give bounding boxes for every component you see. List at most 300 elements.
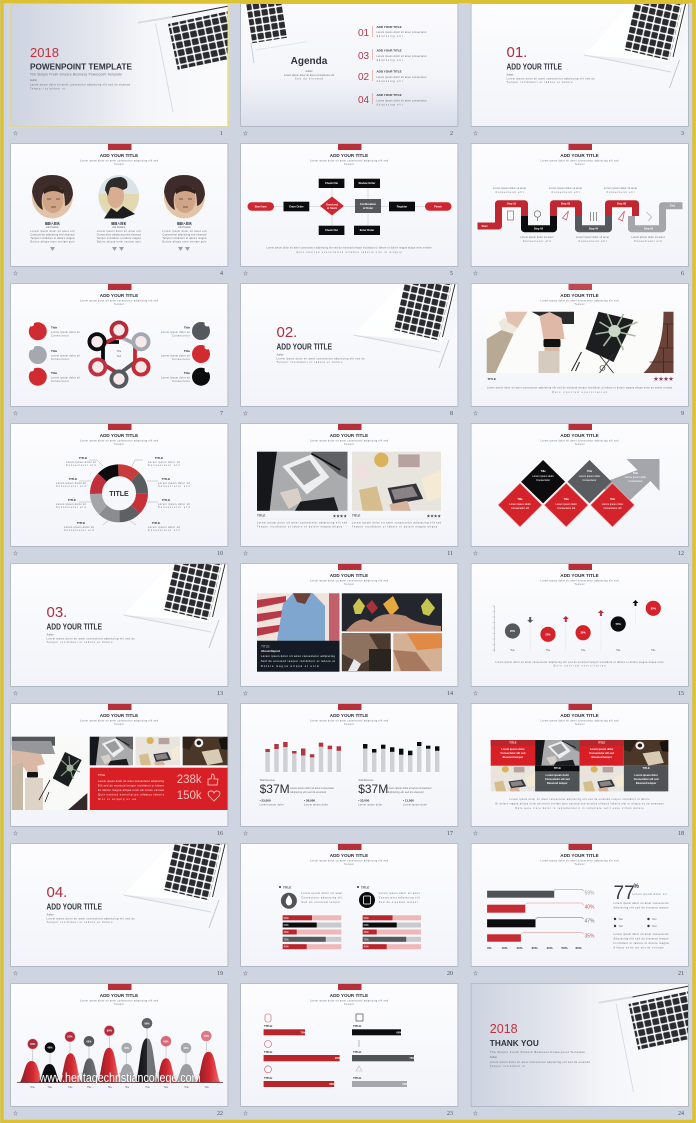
page number 14: ☆ <box>243 690 248 697</box>
legend: Text <box>618 925 623 928</box>
member 1 text: Tempor incididunt ut labore magna <box>30 237 75 240</box>
member 3 text: Dolore aliqua enim veniam quis <box>162 240 207 244</box>
hexagon diagram: Text <box>117 355 122 358</box>
left progress bars: 75% <box>284 937 289 941</box>
page number 23: 23 <box>447 1111 453 1117</box>
page number 12: ☆ <box>473 550 478 557</box>
page number 15: 15 <box>678 691 684 697</box>
left caption: Lorem ipsum dolor sit amet consectetur adipiscing elit sed <box>257 522 348 524</box>
agenda item 04: 04 <box>358 95 370 106</box>
left items: Title <box>51 371 57 375</box>
caption title and rating: TITLE <box>488 377 496 381</box>
page number 6: ☆ <box>473 270 478 277</box>
page number 20: 20 <box>447 971 453 977</box>
legend: Text <box>618 918 623 921</box>
stat description: Lorem ipsum dolor sit amet consectetur <box>614 902 669 905</box>
red tile 2: TITLE <box>598 740 606 744</box>
lower captions: Consectetur elit <box>634 240 662 243</box>
red diamond 1: Lorem ipsum dolor <box>509 502 531 506</box>
right progress bars: 50% <box>364 916 369 920</box>
page number 1: 1 <box>220 131 223 137</box>
black diamond: Consectetur <box>536 478 550 482</box>
slide header: ADD YOUR TITLE <box>560 433 599 438</box>
slide header: ADD YOUR TITLE <box>100 433 138 438</box>
page number 8: 8 <box>450 411 453 417</box>
section text: Tempor incididunt ut labore et dolore <box>46 641 113 644</box>
red diamond 1: Title <box>517 497 523 501</box>
left labels: Lorem ipsum dolor sit <box>64 526 94 529</box>
slide header: ADD YOUR TITLE <box>560 853 599 858</box>
left items: Title <box>51 349 57 353</box>
page number 24: ☆ <box>473 1110 478 1117</box>
page number 16: 16 <box>217 831 223 837</box>
lower captions <box>520 236 665 243</box>
dark gray diamond <box>568 460 612 503</box>
slide header: ADD YOUR TITLE <box>330 573 368 578</box>
photo caption box: TITLE <box>261 644 270 648</box>
section number: 03. <box>46 604 67 621</box>
slide 6: zigzag timeline <box>472 144 688 266</box>
mountains <box>20 1038 220 1082</box>
slide header <box>310 144 389 166</box>
left column heading: Consectetur adipiscing elit <box>301 896 343 900</box>
photo caption box: Lorem ipsum dolor sit amet consectetur adipiscing <box>261 654 336 658</box>
member 1 text: Dolore aliqua enim veniam quis <box>30 240 75 244</box>
left column heading: Sed do eiusmod tempor <box>301 901 341 904</box>
page number 3: ☆ <box>473 130 478 137</box>
right labels: TITLE <box>162 477 170 481</box>
chart axis labels <box>487 946 582 950</box>
section text: Tempor incididunt ut labore et dolore <box>506 81 573 84</box>
agenda text: Lorem ipsum dolor sit amet consectetur elit <box>284 74 334 77</box>
member 2 text: Consectetur adipiscing sed eiusmod <box>97 234 141 236</box>
right items: Lorem ipsum dolor sit <box>161 376 190 380</box>
slide header: ADD YOUR TITLE <box>330 853 368 858</box>
page number 24: 24 <box>678 1111 684 1117</box>
laptop illustration <box>598 986 696 1092</box>
right items: Title <box>184 349 190 353</box>
member 2 text <box>97 220 141 251</box>
slide 2: agenda <box>241 4 458 126</box>
slide header: Tempor <box>574 723 585 726</box>
page number 20: ☆ <box>243 970 248 977</box>
step labels: Step 02 <box>534 227 544 231</box>
red tile 2: Lorem ipsum dolor <box>590 747 613 751</box>
lower captions: Lorem ipsum dolor sit amet <box>576 236 609 239</box>
laptop illustration <box>584 0 688 90</box>
slide 3: section 01 <box>472 4 688 126</box>
right column heading: TITLE <box>361 886 369 890</box>
left revenue stat: Lorem ipsum dolor <box>304 804 328 806</box>
slide header: Lorem ipsum dolor sit amet consectetur adipiscing elit sed <box>80 160 159 162</box>
page number 9: ☆ <box>473 410 478 417</box>
section text: Lorem ipsum dolor sit amet consectetur adipiscing elit sed do <box>276 358 365 360</box>
red diamond 3: Lorem ipsum dolor <box>602 502 623 506</box>
stat description <box>614 902 669 910</box>
page number 22: 22 <box>217 1111 223 1117</box>
left column heading: Lorem ipsum dolor sit amet <box>301 892 343 895</box>
right column heading: Lorem ipsum dolor sit amet <box>379 892 420 895</box>
slide header: Lorem ipsum dolor sit amet consectetur adipiscing elit sed <box>310 720 389 722</box>
page number 2: ☆ <box>243 130 248 137</box>
axis labels: Title <box>510 649 515 652</box>
right labels: Lorem ipsum dolor sit <box>148 461 180 464</box>
axis labels: Title <box>546 649 551 652</box>
right bar group: 75% <box>409 1056 415 1060</box>
slide 17: bar charts <box>241 704 458 826</box>
right bar group: TITLE <box>353 1050 361 1054</box>
slide header: Lorem ipsum dolor sit amet consectetur adipiscing elit sed <box>80 720 159 722</box>
agenda item 03: Adipiscing elit <box>376 59 403 62</box>
left progress bars: 50% <box>284 916 289 920</box>
value bubbles: 60% <box>163 1039 169 1043</box>
bottom boxes: Enter Order <box>360 228 374 232</box>
left labels: TITLE <box>69 477 77 481</box>
slide 23: icon bars <box>241 984 458 1106</box>
slide 8: section 02 <box>241 284 458 406</box>
slide header <box>540 424 619 446</box>
gray tile 2: Lorem ipsum dolor <box>634 773 658 777</box>
right progress bars <box>363 915 421 949</box>
chart axis labels: 50% <box>562 946 568 950</box>
page number 5 <box>243 270 453 277</box>
end pill <box>425 202 452 211</box>
slide header: Tempor <box>114 1003 124 1006</box>
slide header: Lorem ipsum dolor sit amet consectetur adipiscing elit sed <box>310 440 389 442</box>
axis <box>492 606 495 652</box>
watermark: www.heritagechristiancollege.com <box>39 1070 201 1085</box>
section title: ADD YOUR TITLE <box>46 622 102 632</box>
right labels: Consectetur elit <box>148 464 180 467</box>
red tile 2: Eiusmod tempor <box>591 755 612 759</box>
slide header: ADD YOUR TITLE <box>100 713 138 718</box>
photo caption box <box>257 641 340 672</box>
page number 18 <box>473 830 684 837</box>
slide 22: mountain chart <box>11 984 228 1106</box>
slide 13: section 03 <box>11 564 228 686</box>
agenda text: Sed do eiusmod <box>295 78 324 80</box>
agenda item 02: Adipiscing elit <box>376 80 403 83</box>
agenda text: Author <box>305 70 313 73</box>
right revenue stat <box>358 779 432 806</box>
agenda item 02 <box>358 70 427 83</box>
red tile 1: Eiusmod tempor <box>503 755 523 759</box>
page number 23 <box>243 1110 453 1117</box>
page number 18: ☆ <box>473 830 478 837</box>
caption: Quis nostrud exercitation ullamco laboris nisi ut aliquip <box>296 251 402 254</box>
left caption <box>257 513 348 528</box>
thank you heading: THANK YOU <box>490 1038 539 1048</box>
left revenue stat: Lorem ipsum dolor <box>260 804 284 806</box>
member 1 text: Job Position <box>46 226 60 229</box>
decision diamond: in Stock <box>327 206 338 210</box>
bar chart: 47% <box>584 918 595 924</box>
page number 4: ☆ <box>13 270 18 277</box>
slide header: Tempor <box>344 723 354 726</box>
page number 9 <box>473 410 684 417</box>
left caption: TITLE <box>257 514 265 518</box>
slide header: ADD YOUR TITLE <box>560 293 599 298</box>
section text <box>276 354 365 364</box>
x axis labels: Title <box>184 1086 189 1089</box>
agenda item 02: Lorem ipsum dolor sit amet consectetur <box>376 76 427 79</box>
lower captions: Lorem ipsum dolor sit amet <box>520 236 554 239</box>
cover text <box>30 79 131 90</box>
slide header: ADD YOUR TITLE <box>330 153 368 158</box>
axis labels: Title <box>581 649 586 652</box>
agenda item 01 <box>358 25 427 39</box>
agenda heading: Agenda <box>291 56 328 67</box>
left revenue stat: ▪ 23,000 <box>260 798 271 802</box>
slide header: ADD YOUR TITLE <box>100 153 138 158</box>
section text: Tempor incididunt ut labore et dolore <box>276 361 343 364</box>
slide header: Tempor <box>574 863 585 866</box>
leader lines <box>79 460 158 525</box>
member 3 text: Tempor incididunt ut labore magna <box>162 237 207 240</box>
page number 7 <box>13 410 223 417</box>
slide header: Tempor <box>344 1003 354 1006</box>
upper captions: Lorem ipsum dolor sit amet <box>549 187 582 190</box>
gray tile 1: Eiusmod tempor <box>547 781 568 785</box>
bar chart: 59% <box>584 890 595 896</box>
value bubbles: 40% <box>183 1046 189 1050</box>
arrows <box>527 600 638 623</box>
gray tile 1: TITLE <box>554 766 561 770</box>
left labels <box>56 456 96 532</box>
slide header: ADD YOUR TITLE <box>560 153 599 158</box>
left caption: Tempor incididunt ut labore et dolore magna aliqua <box>257 526 343 528</box>
right bar chart <box>363 742 439 772</box>
black diamond: Lorem ipsum dolor <box>532 474 554 478</box>
right progress bars: 60% <box>364 923 369 927</box>
slide 1 selection outline <box>10 3 228 127</box>
cover text: Lorem ipsum dolor sit amet consectetur adipiscing elit sed do eiusmod <box>30 84 131 86</box>
slide header <box>80 144 159 166</box>
member 3 text: Lorem ipsum dolor sit amet elit <box>162 230 207 233</box>
section number: 01. <box>506 44 527 61</box>
bottom boxes: Check Out <box>325 228 338 232</box>
left labels: Lorem ipsum dolor sit <box>66 461 96 464</box>
left items: Consectetur <box>51 358 69 361</box>
right revenue stat: $37M <box>358 782 388 796</box>
right items: Title <box>184 371 190 375</box>
slide header: Lorem ipsum dolor sit amet consectetur adipiscing elit sed <box>80 440 159 442</box>
caption text <box>487 386 672 394</box>
caption <box>496 798 664 810</box>
slide 21: horizontal bars and 77 percent <box>472 844 688 966</box>
slide 10: donut <box>11 424 228 546</box>
start pill <box>248 202 274 211</box>
page number 14 <box>243 690 453 697</box>
agenda item 01: Lorem ipsum dolor sit amet consectetur <box>376 31 427 34</box>
slide header: Tempor <box>114 723 124 726</box>
caption text: Quis nostrud exercitation <box>552 391 608 394</box>
right labels: Consectetur elit <box>158 485 190 488</box>
step labels: Step 05 <box>617 202 627 206</box>
left items: Consectetur <box>51 380 69 383</box>
cover title: POWENPOINT TEMPLATE <box>30 62 132 72</box>
page number 13: ☆ <box>13 690 18 697</box>
photo caption box: Dolore magna aliqua ut enim <box>261 664 319 668</box>
legend: Text <box>652 925 657 928</box>
slide 18: tile grid <box>472 704 688 826</box>
photo: striped flag and blue shirt <box>257 593 340 641</box>
agenda item 01: ADD YOUR TITLE <box>376 25 402 29</box>
caption: Quis nostrud exercitation <box>554 664 606 668</box>
slide header <box>80 984 159 1006</box>
slide 12: diamonds <box>472 424 688 546</box>
small photos row <box>90 737 228 765</box>
member 1 text: 攝錄入姓名 <box>45 220 60 226</box>
page number 18: 18 <box>678 831 684 837</box>
left items: Lorem ipsum dolor sit <box>51 354 80 358</box>
page number 10: 10 <box>217 551 223 557</box>
slide header: Tempor <box>574 583 585 586</box>
left bar group: 90% <box>335 1056 341 1060</box>
slide 4: team portraits <box>11 144 228 266</box>
slide header: Lorem ipsum dolor sit amet consectetur adipiscing elit sed <box>540 580 619 582</box>
page number 16: ☆ <box>13 830 18 837</box>
page number 22: ☆ <box>13 1110 18 1117</box>
red stats panel: 150k <box>177 790 202 802</box>
x axis labels: Title <box>204 1086 209 1089</box>
left column heading <box>279 886 343 909</box>
process box: Enter Order <box>289 204 304 208</box>
slide header: ADD YOUR TITLE <box>100 293 138 298</box>
red stats panel <box>90 768 228 810</box>
laptop illustration <box>138 6 240 112</box>
left revenue stat: Total Revenue <box>260 779 276 782</box>
slide header: ADD YOUR TITLE <box>330 993 368 998</box>
x axis labels: Title <box>30 1086 35 1089</box>
light gray arrow: Title <box>633 471 639 475</box>
caption: Lorem ipsum dolor sit amet consectetur adipiscing elit sed do eiusmod tempor incididunt ut labore et dolore magna aliqua enim <box>495 661 664 664</box>
slide 9: wide photo <box>472 284 688 406</box>
cover subtitle: The Simple Fresh Sincere Business Powerpoint Template <box>30 72 122 76</box>
page number 9: 9 <box>681 411 684 417</box>
slide header: Lorem ipsum dolor sit amet consectetur adipiscing elit sed <box>310 160 389 162</box>
agenda item 04: Lorem ipsum dolor sit amet consectetur <box>376 100 427 102</box>
red diamond 2: Lorem ipsum dolor <box>555 502 577 506</box>
page number 13: 13 <box>217 691 223 697</box>
right items <box>161 322 210 386</box>
left bar chart <box>265 742 341 772</box>
slide header: Tempor <box>574 163 585 166</box>
slide header: Tempor <box>114 303 124 306</box>
red diamond 2: Title <box>564 497 569 501</box>
right items: Lorem ipsum dolor sit <box>161 331 190 334</box>
page number 7: ☆ <box>13 410 18 417</box>
agenda item 02: 02 <box>358 72 370 83</box>
caption <box>266 246 432 254</box>
page number 19 <box>13 970 223 977</box>
photo caption box: Sed do eiusmod tempor incididunt ut labore et <box>261 659 335 663</box>
right caption: Tempor incididunt ut labore et dolore magna aliqua <box>352 526 438 528</box>
red diamond 2 <box>544 483 588 527</box>
page number 5: 5 <box>450 271 453 277</box>
value bubbles: 80% <box>107 1029 113 1033</box>
caption <box>495 661 664 668</box>
red tile 2 <box>580 740 624 766</box>
page number 8 <box>243 410 453 417</box>
section text: Lorem ipsum dolor sit amet consectetur adipiscing elit sed do <box>46 638 135 640</box>
left bar group: 80% <box>329 1082 335 1086</box>
slide header: Lorem ipsum dolor sit amet consectetur adipiscing elit sed <box>540 440 619 442</box>
section text: Lorem ipsum dolor sit amet consectetur adipiscing elit sed do <box>46 918 135 920</box>
slide 24: thank you <box>472 984 688 1106</box>
slide header <box>310 984 389 1006</box>
value bubbles: 30% <box>124 1046 130 1050</box>
photo: desk with watch and plant <box>487 312 674 373</box>
agenda item 03: Lorem ipsum dolor sit amet consectetur <box>376 55 427 58</box>
light gray arrow <box>600 459 660 508</box>
side paragraph: Aliqua enim ad minim veniam <box>614 946 664 950</box>
right revenue stat: Lorem ipsum dolor sit amet consectetur <box>388 787 432 790</box>
dark gray diamond: Title <box>587 469 593 473</box>
page number 14: 14 <box>447 691 453 697</box>
value bubbles: 53% <box>67 1035 73 1039</box>
left labels: Lorem ipsum dolor sit <box>56 503 86 506</box>
closing text <box>490 1056 590 1068</box>
left revenue stat: Lorem ipsum dolor sit amet consectetur <box>290 787 334 790</box>
big percent stat: Lorem ipsum dolor sit <box>632 893 667 896</box>
step labels <box>482 202 675 231</box>
gray tile 1: Lorem ipsum dolor <box>546 773 569 777</box>
right bar group <box>352 1014 415 1087</box>
slide header: Lorem ipsum dolor sit amet consectetur adipiscing elit sed <box>540 860 619 862</box>
slide 1: cover <box>11 4 228 126</box>
slide header <box>540 704 619 726</box>
red tile 1 <box>491 740 535 766</box>
left bar group: TITLE <box>264 1076 272 1080</box>
data circles <box>505 601 661 642</box>
big percent stat <box>614 883 667 904</box>
page number 10: ☆ <box>13 550 18 557</box>
x axis labels: Title <box>145 1086 150 1089</box>
cover text: Tempor incididunt ut <box>30 88 65 90</box>
axis labels: Title <box>616 649 621 652</box>
left labels: Consectetur elit <box>64 529 94 532</box>
left items: Lorem ipsum dolor sit <box>51 331 80 334</box>
page number 17: ☆ <box>243 830 248 837</box>
slide header: Tempor <box>344 443 354 446</box>
section text: Author <box>276 354 284 356</box>
member 3 text <box>162 220 207 251</box>
slide header: Tempor <box>344 583 354 586</box>
right labels: Consectetur elit <box>158 506 190 509</box>
left column heading: TITLE <box>283 886 291 890</box>
slide header: Tempor <box>574 303 585 306</box>
right revenue stat: ▪ 23,000 <box>358 798 370 802</box>
lower captions: Consectetur elit <box>523 240 551 243</box>
slide header: ADD YOUR TITLE <box>330 713 368 718</box>
data circles: 50% <box>616 622 621 626</box>
step labels: Step 04 <box>589 227 599 231</box>
section title: ADD YOUR TITLE <box>276 342 332 352</box>
gray process box: of Order <box>363 206 373 210</box>
page number 6: 6 <box>681 271 684 277</box>
connectors <box>274 188 425 226</box>
agenda item 04 <box>358 93 427 106</box>
right labels: TITLE <box>152 521 160 525</box>
caption title and rating <box>488 376 674 382</box>
value bubbles: 62% <box>86 1039 92 1043</box>
right items: Consectetur <box>172 380 190 383</box>
closing text: Author <box>490 1056 497 1059</box>
slide header <box>310 844 389 866</box>
value bubbles: 70% <box>204 1034 210 1038</box>
page number 10 <box>13 550 223 557</box>
